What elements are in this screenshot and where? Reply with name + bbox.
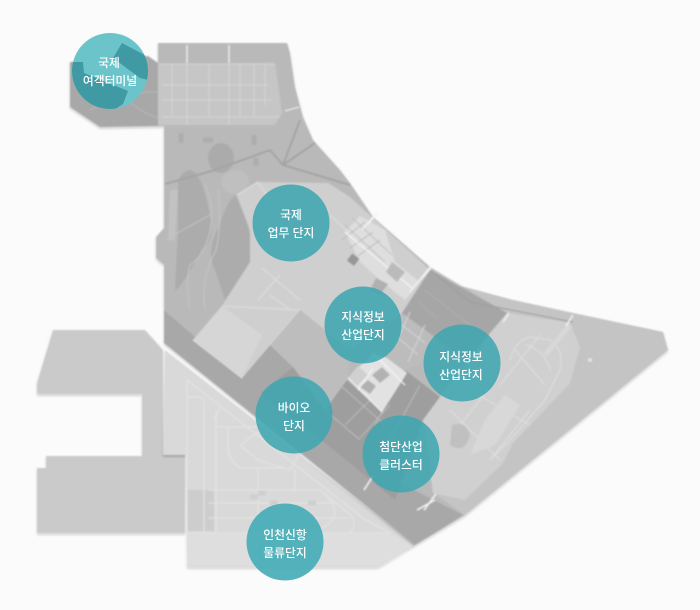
central park [165,120,350,310]
map base [37,43,668,567]
circle: 지식정보 산업단지 1 [324,286,402,364]
band along expressway [164,310,463,545]
circle: 첨단산업 클러스터: 클러스터 [379,458,423,472]
terminal dark patches [72,43,148,109]
circle: 국제 여객터미널 [72,33,148,109]
circle: 인천신항 물류단지: 물류단지 [263,546,307,560]
circle: 국제 여객터미널: 국제 [98,56,120,70]
circle: 국제 업무 단지 [252,184,330,262]
circle: 지식정보 산업단지 1: 지식정보 [341,310,385,324]
terminal paths [90,92,158,118]
circle: 국제 업무 단지: 국제 [280,208,302,222]
circle: 바이오 단지: 단지 [283,419,305,433]
outer east land [430,267,668,515]
biotech grid [242,310,440,500]
circle: 바이오 단지: 바이오 [278,401,310,415]
white block [348,353,407,412]
circle: 지식정보 산업단지 1: 산업단지 [341,328,385,342]
circle: 지식정보 산업단지 2 [424,324,500,402]
east pale district [423,313,580,500]
circle: 첨단산업 클러스터 [362,416,440,492]
circle: 지식정보 산업단지 2: 지식정보 [439,350,483,364]
circle: 인천신항 물류단지 [246,504,324,580]
eastern marker dot [588,358,592,362]
main district land [156,43,668,545]
circle: 첨단산업 클러스터: 첨단산업 [379,440,423,454]
south logistics block [163,350,415,567]
circle: 국제 여객터미널: 여객터미널 [83,74,137,88]
north shore strip [430,270,573,322]
white road crossings [364,213,573,510]
north grid block [158,45,299,125]
pale district [193,182,430,378]
terminal land [70,56,158,127]
circle: 바이오 단지 [256,376,332,454]
west block [37,330,185,533]
dark north-east zone [388,270,507,370]
circle: 인천신항 물류단지: 인천신항 [263,528,307,542]
circle: 지식정보 산업단지 2: 산업단지 [439,368,483,382]
circle: 국제 업무 단지: 업무 단지 [268,226,314,240]
